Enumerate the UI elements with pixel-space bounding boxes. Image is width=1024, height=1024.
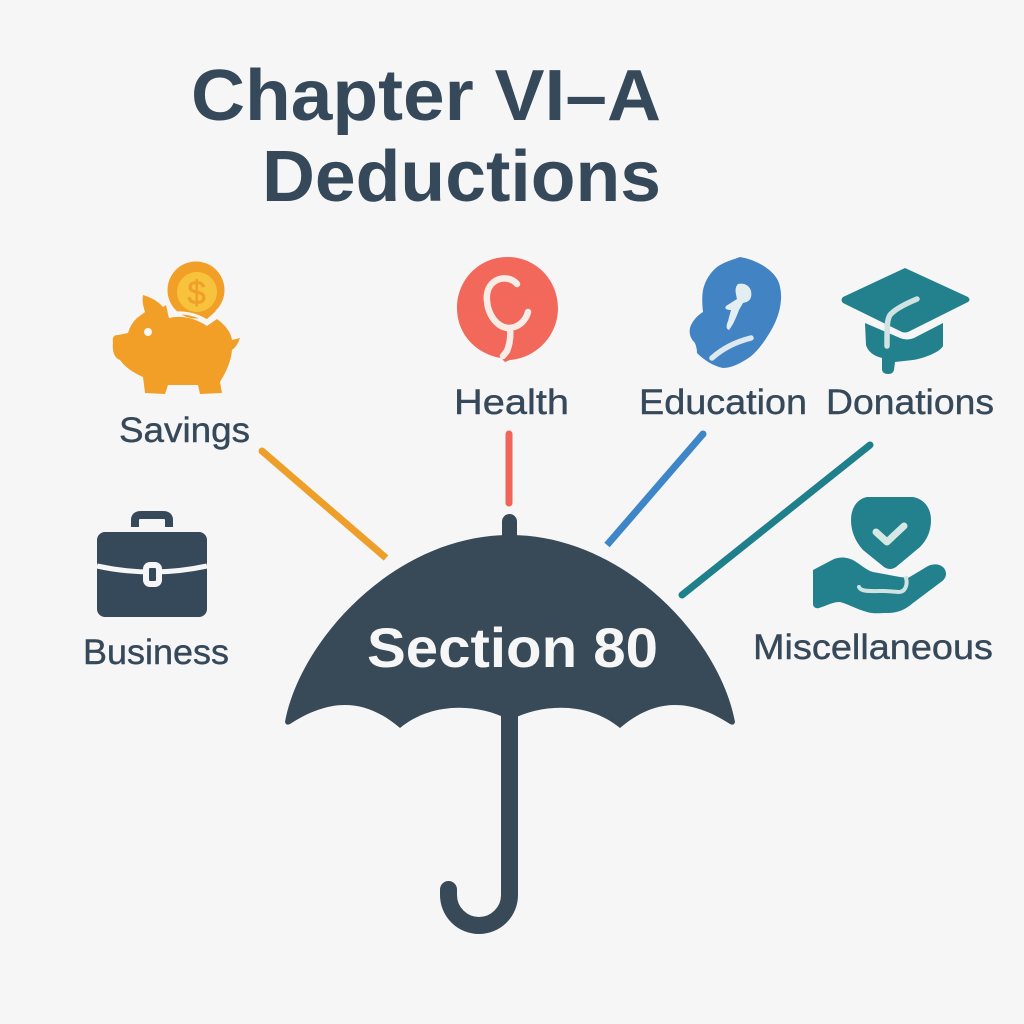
- icon: piggy bank with coin: $: [187, 274, 206, 311]
- icon: education head: [690, 257, 781, 368]
- icon: hand holding heart: [813, 497, 946, 613]
- label: Miscellaneous: Miscellaneous: [753, 628, 993, 667]
- icon: piggy bank with coin: [113, 262, 240, 394]
- umbrella tip: [502, 514, 517, 544]
- label: Business: Business: [83, 633, 229, 672]
- title: Chapter VI–A: [191, 56, 661, 136]
- title: Deductions: [262, 137, 661, 217]
- connector: Health: [506, 434, 512, 503]
- umbrella: [285, 514, 735, 925]
- connector: Donations: [682, 445, 870, 595]
- connector: Savings: [258, 448, 386, 558]
- label: Education: Education: [639, 383, 807, 422]
- label: Health: Health: [454, 383, 569, 422]
- label: Donations: Donations: [826, 383, 994, 422]
- icon: briefcase: [97, 515, 207, 617]
- connector: Education: [607, 430, 706, 545]
- icon: graduation cap: [842, 268, 970, 374]
- umbrella handle: [448, 712, 510, 925]
- label: Savings: Savings: [119, 411, 250, 450]
- umbrella canopy: [285, 535, 735, 728]
- umbrella label: Section 80: Section 80: [367, 616, 658, 679]
- title: [191, 56, 661, 217]
- icon: health stethoscope: [457, 257, 558, 362]
